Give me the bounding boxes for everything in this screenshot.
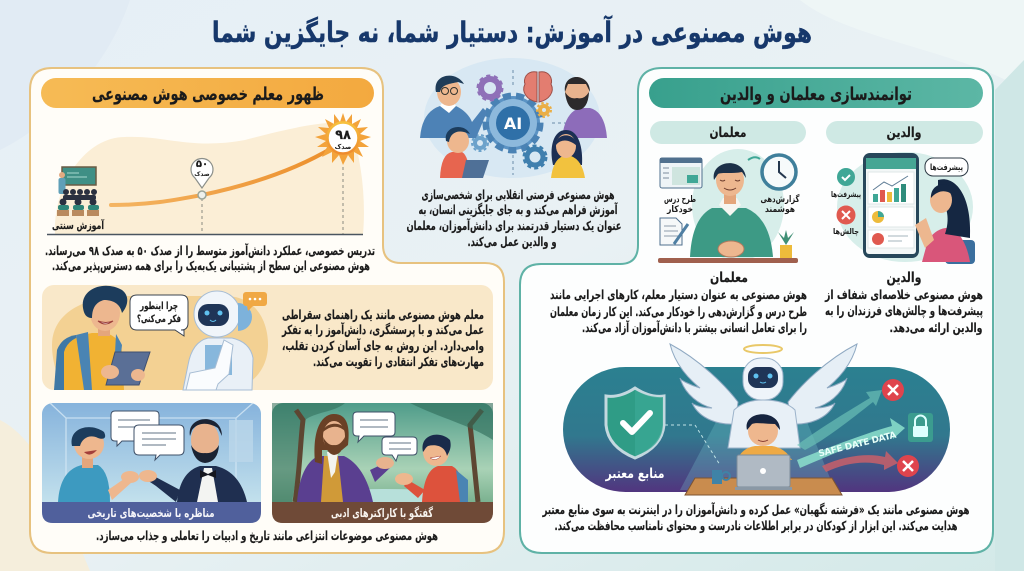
marker: 50th percentile: صدک: [194, 170, 210, 178]
icon: blocked: [897, 455, 919, 477]
marker: 98th percentile: [315, 113, 371, 165]
icon: challenges cross: [833, 206, 859, 237]
icon: progress check: پیشرفت‌ها: [831, 190, 861, 199]
heading: [41, 78, 374, 108]
desk and laptop: [685, 455, 842, 495]
intro text: و والدین عمل می‌کند.: [468, 234, 556, 249]
heading: [649, 78, 983, 108]
sub-heading: teachers: معلمان: [710, 125, 746, 141]
guardian text: [542, 502, 970, 533]
panel frame: [520, 68, 993, 553]
icon: AI gear: [486, 96, 540, 150]
figure: teacher: [690, 163, 773, 257]
intro text: هوش مصنوعی فرصتی انقلابی برای شخصی‌سازی: [422, 187, 614, 202]
figure: mother: [915, 179, 975, 264]
center intro: [406, 58, 622, 249]
figure: boy with tablet: [440, 127, 489, 178]
label: smart reporting: [760, 193, 800, 215]
icon: AI gear: AI: [504, 114, 522, 133]
speech bubbles: [111, 411, 184, 460]
label: automatic lesson plan: [664, 195, 696, 215]
parent description: والدین ارائه می‌دهد.: [890, 320, 982, 335]
Socratic text: [281, 307, 484, 369]
figure: child: [737, 414, 792, 460]
sub-heading: parents: والدین: [886, 125, 922, 141]
caption bar: [42, 502, 261, 523]
marker: 98th percentile: ۹۸: [335, 128, 351, 143]
icon: classroom: [57, 167, 99, 216]
chart caption: تدریس خصوصی، عملکرد دانش‌آموز متوسط را از صدک ۵۰ به صدک ۹۸ می‌رساند.: [45, 243, 375, 258]
chart: percentile curve: [47, 113, 371, 234]
icon: phone: [863, 153, 919, 258]
illustration: AI collaboration: [420, 58, 607, 178]
chart caption: [45, 243, 375, 273]
intro text: [406, 187, 622, 249]
figure: bearded man: [562, 77, 607, 138]
speech bubble: چرا اینطور: [139, 301, 178, 312]
Socratic text: مهارت‌های تفکر انتقادی را تقویت می‌کند.: [313, 354, 484, 369]
Socratic text: معلم هوش مصنوعی مانند یک راهنمای سقراطی: [282, 307, 484, 322]
data arrows: SAFE DATE DATA: [817, 431, 898, 460]
intro text: عنوان یک دستیار قدرتمند برای دانش‌آموزان، معلمان: [406, 218, 622, 233]
illustration: thinking robot: [183, 291, 267, 390]
panel frame: [30, 68, 504, 553]
sub-heading: teachers: [650, 121, 806, 144]
speech bubble: progress: پیشرفت‌ها: [930, 163, 963, 173]
teacher description: [550, 270, 807, 335]
label: automatic lesson plan: طرح درس: [664, 195, 696, 205]
label: traditional: آموزش سنتی: [52, 219, 104, 232]
speech bubble: progress: [925, 158, 968, 176]
label: smart reporting: هوشمند: [765, 205, 795, 215]
speech bubble: فکر می‌کنی؟: [137, 314, 181, 325]
parent description: [824, 270, 983, 335]
sub-heading: parents: [826, 121, 983, 144]
figure: robot: [728, 358, 800, 448]
Socratic text: عمل می‌کند و با پرسشگری، دانش‌آموز را به تفکر: [281, 322, 484, 337]
teacher description: معلمان: [710, 270, 748, 286]
teacher description: طرح درس و گزارش‌دهی را خودکار می‌کند. این کار زمان معلمان: [550, 304, 807, 319]
label: smart reporting: گزارش‌دهی: [760, 193, 800, 205]
robot wings: [670, 344, 857, 424]
teacher description: هوش مصنوعی به عنوان دستیار معلم، کارهای اجرایی مانند: [550, 287, 807, 302]
icon: lesson window: [660, 158, 702, 188]
heading: ظهور معلم خصوصی هوش مصنوعی: [92, 84, 324, 105]
icon: gears: [472, 76, 551, 168]
illustration: student with tablet: [54, 286, 150, 390]
icon: clock: [748, 155, 796, 189]
panel: empowering teachers and parents: [520, 68, 993, 553]
icon: document: [660, 218, 688, 245]
Socratic text: وامی‌دارد. این روش به جای آسان کردن تقلب،: [282, 338, 484, 353]
speech bubbles: [353, 412, 417, 461]
icon: challenges cross: چالش‌ها: [833, 227, 859, 237]
panel: AI tutor: [30, 68, 504, 553]
figure: girl: [551, 130, 585, 178]
icon: shield: [606, 388, 664, 458]
caption bar: گفتگو با کاراکترهای ادبی: [331, 506, 433, 521]
label: automatic lesson plan: خودکار: [666, 205, 693, 215]
illustration: boy in hoodie: [395, 435, 468, 502]
data arrows: [797, 390, 905, 472]
caption bar: [272, 502, 493, 523]
card: debate with historical figures: [42, 403, 261, 523]
icon: progress check: [831, 168, 861, 199]
card: Socratic tutor: [42, 285, 493, 390]
illustration: guardian angel: [563, 344, 950, 495]
marker: 98th percentile: صدک: [335, 143, 351, 151]
marker: 50th percentile: ۵۰: [196, 159, 208, 170]
illustration: boy: [58, 427, 139, 502]
icon: lock: [908, 413, 933, 442]
illustration: literary character: [297, 414, 394, 502]
marker: 50th percentile: [191, 159, 213, 188]
speech bubble: [130, 295, 188, 336]
illustration: parent: [831, 152, 975, 264]
intro text: آموزش فراهم می‌کند و به جای جایگزینی انسان، به: [418, 202, 618, 217]
bottom caption: هوش مصنوعی موضوعات انتزاعی مانند تاریخ و ادبیات را تعاملی و جذاب می‌سازد.: [96, 528, 438, 543]
illustration: Lincoln: [139, 419, 247, 502]
icon: plant: [778, 230, 794, 258]
halo: [744, 345, 782, 353]
chart caption: هوش مصنوعی این سطح از پشتیبانی یک‌به‌یک را برای همه دسترس‌پذیر می‌کند.: [52, 258, 370, 273]
title: هوش مصنوعی در آموزش: دستیار شما، نه جایگزین شما: [212, 15, 812, 49]
parent description: والدین: [886, 270, 922, 286]
teacher description: را برای تعامل انسانی بیشتر با دانش‌آموزان آزاد می‌کند.: [582, 320, 807, 335]
caption bar: مناظره با شخصیت‌های تاریخی: [88, 506, 214, 520]
icon: brain: [524, 72, 552, 102]
card: conversation with literary characters: [272, 403, 493, 523]
icon: desk: [658, 258, 798, 263]
illustration: teacher: [658, 149, 800, 263]
icon: blocked: [882, 379, 904, 401]
label: trusted sources: منابع معتبر: [605, 466, 664, 482]
figure: man with glasses: [420, 76, 487, 138]
heading: توانمندسازی معلمان و والدین: [720, 84, 912, 105]
